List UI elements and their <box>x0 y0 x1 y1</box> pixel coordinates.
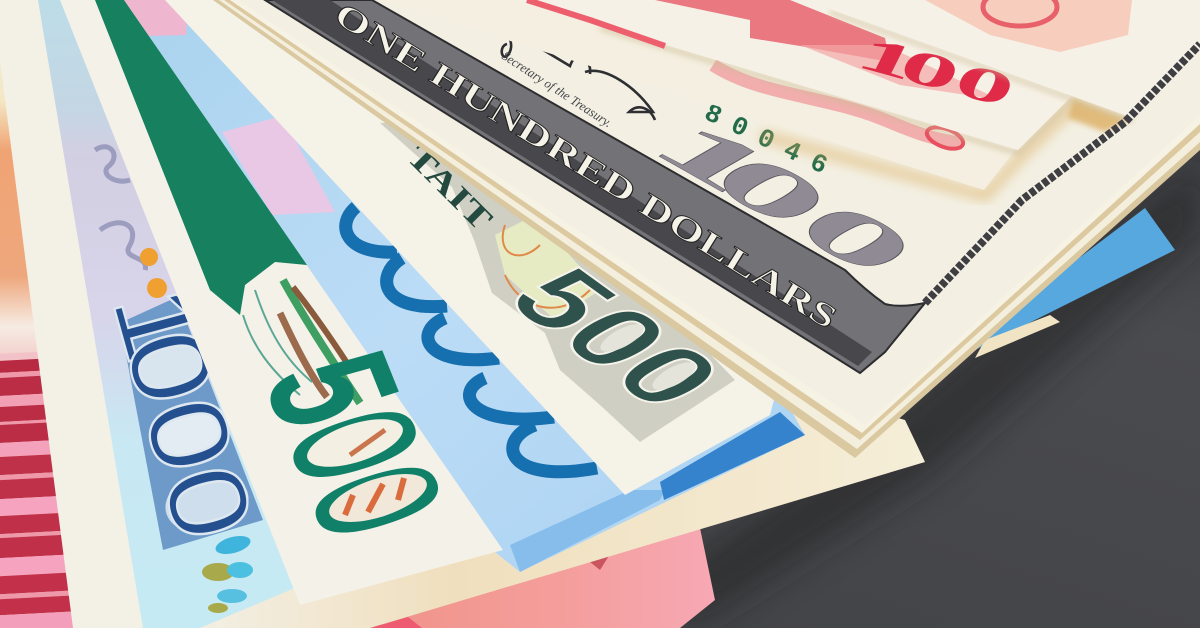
peach rosette <box>925 0 1132 52</box>
dark blue strip <box>660 412 805 500</box>
blue zeros <box>346 207 597 472</box>
orange dots <box>140 248 167 298</box>
ribbon ornament <box>243 280 360 403</box>
curly ornament <box>95 147 146 270</box>
numeral 1000: 1000 <box>88 273 277 553</box>
red print fragment <box>713 65 962 143</box>
numeral 100: 100 <box>629 109 943 287</box>
note: cream note with dark green 500 <box>165 0 800 495</box>
counters of the zeros <box>302 409 432 532</box>
numeral 500: 500 <box>481 251 749 425</box>
band lettering: ONE HUNDRED DOLLARS <box>328 0 843 337</box>
green engraved area <box>95 0 307 315</box>
pale ovals <box>129 335 254 541</box>
note: far-left orange and red <box>0 60 73 628</box>
gold shadow at right corner <box>1068 98 1130 132</box>
note: left cream margin <box>0 0 143 628</box>
note stack: lower cream layers <box>213 0 1200 458</box>
note: cream note with green 500 <box>60 0 503 605</box>
red engraving <box>655 0 890 62</box>
lattice print <box>380 120 749 442</box>
darker band shading <box>272 0 872 366</box>
light blue strip <box>510 490 665 572</box>
note: lavender note with blue 1000 <box>30 0 340 628</box>
numeral 100: 100 <box>848 27 1025 117</box>
red edge print <box>527 0 665 46</box>
serial number: 80046 <box>700 98 832 181</box>
treasury caption: Secretary of the Treasury. <box>499 48 615 130</box>
note: right blue edge <box>975 208 1175 358</box>
note: blue 5000 note <box>110 0 805 572</box>
soft shadow below note B <box>600 28 1071 153</box>
counters of the zeros <box>600 324 696 390</box>
note: cream top note C <box>380 0 1071 190</box>
red ring <box>983 0 1057 26</box>
word panel: TAIT <box>400 137 500 237</box>
shadow under the stack <box>650 160 1200 628</box>
note: pink bottom note <box>370 528 715 628</box>
blue print panel <box>120 297 263 550</box>
scalloped border <box>925 44 1200 303</box>
signature <box>497 31 655 120</box>
numeral 500: 500 <box>226 331 482 559</box>
soft shadow below note A <box>830 12 1133 121</box>
note: cream top note A <box>805 0 1200 118</box>
red stripes <box>0 352 73 628</box>
small floral pattern <box>202 533 253 613</box>
note: cream underlayer <box>200 390 925 628</box>
warm shadow below upper notes <box>760 104 1075 196</box>
note: cream top note B with red 100 <box>515 0 1133 150</box>
pink patch <box>120 0 188 36</box>
portrait band <box>265 0 925 373</box>
lavender patch <box>222 116 335 215</box>
note: US 100 dollar bill <box>238 0 1200 425</box>
